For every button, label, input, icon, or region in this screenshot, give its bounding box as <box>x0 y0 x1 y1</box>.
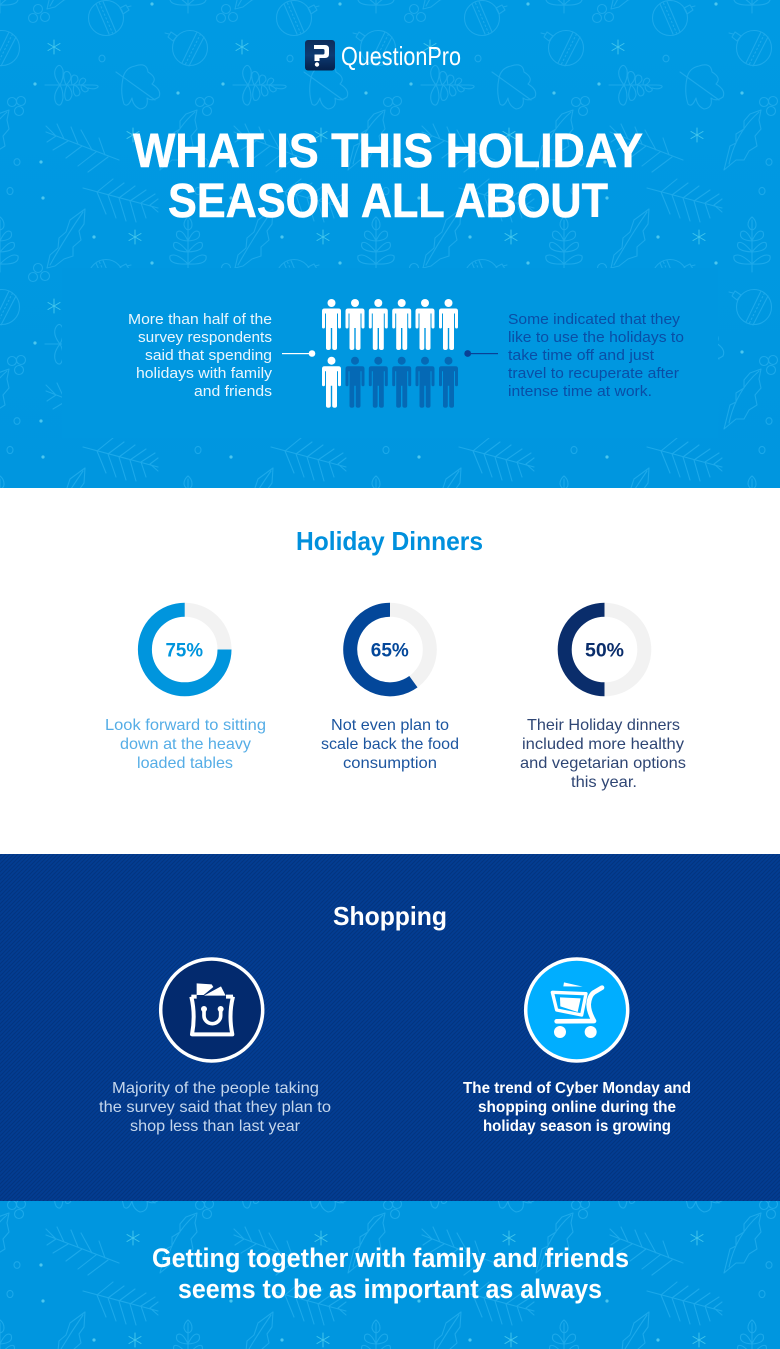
text: spending holidays with family: More than half of the <box>128 311 272 328</box>
text: spending holidays with family: and friends <box>194 383 272 400</box>
text: cyber monday: shopping online during the <box>478 1099 676 1116</box>
donut 75% <box>145 610 224 689</box>
text: spending holidays with family: holidays with family <box>136 365 273 382</box>
text: shop less: shop less than last year <box>130 1118 301 1135</box>
text: healthy options: this year. <box>571 774 637 791</box>
hero section <box>0 0 780 540</box>
closing statement <box>152 1243 629 1304</box>
text: travel to recuperate: like to use the holidays to <box>508 329 684 346</box>
text: not even plan: scale back the food <box>321 736 459 753</box>
connector left <box>282 350 315 357</box>
text: healthy options: Their Holiday dinners <box>527 717 680 734</box>
title <box>133 125 643 228</box>
text: shop less: the survey said that they plan to <box>99 1099 331 1116</box>
heading: shopping: Shopping <box>333 901 447 931</box>
text: not even plan: consumption <box>343 755 437 772</box>
title: WHAT IS THIS HOLIDAY <box>133 125 643 178</box>
text: travel to recuperate: travel to recuperate after <box>508 365 679 382</box>
text: look forward <box>105 717 266 772</box>
closing statement: seems to be as important as always <box>178 1274 602 1304</box>
text: look forward: down at the heavy <box>120 736 251 753</box>
text: spending holidays with family: survey respondents <box>138 329 272 346</box>
icon: shopping cart <box>526 959 628 1061</box>
donut 75%: 75% <box>166 640 203 662</box>
text: not even plan <box>321 717 459 772</box>
logo: QuestionPro <box>341 41 461 71</box>
closing statement: Getting together with family and friends <box>152 1243 629 1273</box>
footer section <box>0 1201 780 1349</box>
logo <box>305 40 461 71</box>
donut 50% <box>565 610 644 689</box>
text: travel to recuperate: Some indicated that they <box>508 311 681 328</box>
connector right <box>464 350 498 357</box>
text: spending holidays with family: said that spending <box>145 347 272 364</box>
text: shop less: Majority of the people taking <box>112 1080 319 1097</box>
panel: survey result <box>62 268 718 438</box>
text: not even plan: Not even plan to <box>331 717 449 734</box>
heading: holiday dinners: Holiday Dinners <box>296 526 483 556</box>
text: travel to recuperate <box>508 311 684 400</box>
text: look forward: loaded tables <box>137 755 233 772</box>
text: travel to recuperate: intense time at work. <box>508 383 652 400</box>
text: cyber monday <box>463 1080 691 1135</box>
title: SEASON ALL ABOUT <box>168 175 608 228</box>
text: spending holidays with family <box>128 311 273 400</box>
icon: shopping bag <box>161 959 263 1061</box>
section: shopping <box>0 854 780 1201</box>
text: cyber monday: holiday season is growing <box>483 1118 671 1135</box>
text: healthy options <box>520 717 686 791</box>
donut 50%: 50% <box>585 640 624 662</box>
donut 65% <box>350 610 430 689</box>
section: holiday dinners <box>0 488 780 854</box>
donut 65%: 65% <box>371 640 409 662</box>
text: healthy options: included more healthy <box>522 736 684 753</box>
pictogram: people <box>322 299 458 408</box>
text: travel to recuperate: take time off and just <box>508 347 655 364</box>
text: look forward: Look forward to sitting <box>105 717 266 734</box>
text: healthy options: and vegetarian options <box>520 755 686 772</box>
text: cyber monday: The trend of Cyber Monday and <box>463 1080 691 1097</box>
text: shop less <box>99 1080 331 1135</box>
